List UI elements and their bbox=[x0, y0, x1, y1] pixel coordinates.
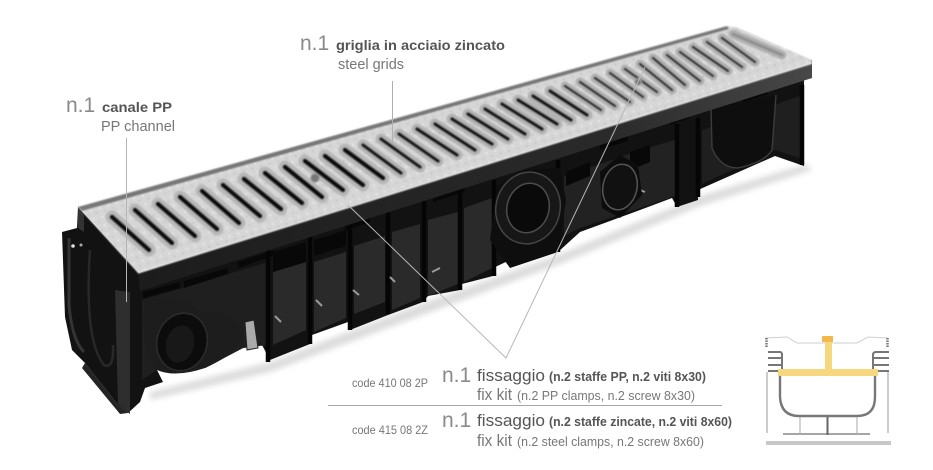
product photo: PP channel with steel grid bbox=[62, 26, 812, 414]
label: griglia in acciaio zincato: griglia in acciaio zincato bbox=[336, 37, 505, 53]
fix kit row 1: fissaggio bbox=[477, 366, 545, 385]
small circular connector bbox=[599, 155, 642, 218]
last slot bbox=[733, 34, 782, 55]
cross-section diagram bbox=[765, 336, 891, 445]
fix kit row 2: fix kit bbox=[477, 431, 512, 450]
bolt right bbox=[634, 78, 642, 86]
screw head bbox=[822, 336, 833, 342]
label: griglia in acciaio zincato bbox=[300, 32, 505, 73]
fix kit row 2: n.1 bbox=[442, 409, 471, 432]
fix kit row 1: code 410 08 2P bbox=[352, 376, 428, 390]
label: griglia in acciaio zincato: steel grids bbox=[338, 57, 404, 73]
yellow screw bbox=[825, 340, 832, 370]
rim bbox=[138, 60, 812, 291]
divider bbox=[328, 404, 722, 406]
floor shadow bbox=[150, 164, 812, 400]
label: canale PP bbox=[66, 94, 175, 135]
centre foot bbox=[826, 417, 828, 435]
label: canale PP: n.1 bbox=[66, 94, 95, 117]
slots middle bbox=[363, 91, 587, 173]
fix kit row 1: (n.2 staffe PP, n.2 viti 8x30) bbox=[549, 370, 706, 384]
large circular connector bbox=[488, 165, 568, 268]
label: canale PP: PP channel bbox=[101, 119, 175, 135]
slots far end bbox=[565, 38, 755, 110]
fix kit row 1: n.1 bbox=[442, 364, 471, 387]
bolt left bbox=[310, 174, 320, 182]
metal tabs at base bbox=[275, 190, 645, 322]
end flange and U profile bbox=[69, 207, 130, 414]
outer walls bbox=[767, 372, 888, 433]
label: canale PP: canale PP bbox=[102, 99, 172, 115]
grate outline bbox=[765, 337, 888, 343]
yellow clamp bar bbox=[778, 369, 878, 376]
left rim block bbox=[768, 352, 782, 372]
side panels bbox=[142, 96, 800, 380]
slot surrounds near end bbox=[112, 150, 383, 250]
left pipe stub bbox=[144, 297, 243, 376]
slot surrounds middle bbox=[363, 91, 587, 173]
fix kit row 2: code 415 08 2Z bbox=[352, 423, 428, 437]
side posts bbox=[766, 338, 888, 348]
label: griglia in acciaio zincato: n.1 bbox=[300, 32, 329, 55]
right rim block bbox=[873, 352, 889, 372]
upper dark windows bbox=[143, 90, 768, 298]
channel body bbox=[62, 62, 812, 413]
vertical ribs bbox=[268, 85, 802, 362]
fix kit row 2: (n.2 staffe zincate, n.2 viti 8x60) bbox=[549, 415, 732, 429]
fix kit row 2 bbox=[352, 409, 732, 450]
fix kit row 2: fissaggio bbox=[477, 411, 545, 430]
inner U channel bbox=[780, 375, 875, 416]
slot surrounds far end bbox=[565, 34, 782, 110]
steel grid bbox=[78, 26, 812, 273]
base bbox=[783, 433, 870, 435]
fix kit row 1: (n.2 PP clamps, n.2 screw 8x30) bbox=[517, 388, 695, 403]
feet bbox=[800, 417, 857, 435]
fix kit row 2: (n.2 steel clamps, n.2 screw 8x60) bbox=[517, 434, 704, 449]
tab bbox=[245, 320, 258, 350]
fix kit row 1: fix kit bbox=[477, 385, 512, 404]
slots near end bbox=[112, 150, 383, 250]
leader lines bbox=[126, 67, 645, 358]
fix kit row 1 bbox=[352, 364, 706, 404]
ground bar bbox=[766, 441, 891, 445]
U profile at far end bbox=[711, 95, 776, 168]
